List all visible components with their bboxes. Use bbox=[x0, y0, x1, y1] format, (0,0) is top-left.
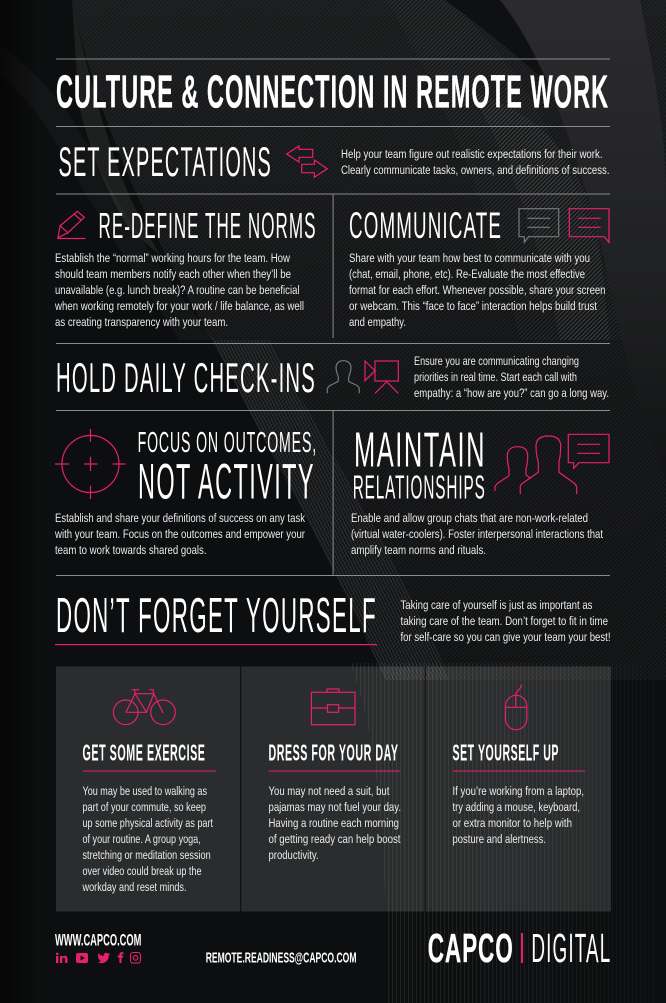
icon: youtube bbox=[76, 953, 88, 963]
icon: linkedin bbox=[56, 953, 68, 963]
text: dress body: You may not need a suit, but bbox=[268, 784, 390, 798]
text: setup body: posture and alertness. bbox=[452, 832, 546, 846]
icon: facebook bbox=[118, 952, 123, 963]
heading underline bbox=[55, 644, 377, 645]
text: exercise body: workday and reset minds. bbox=[82, 880, 186, 894]
panel: communicate bbox=[349, 205, 609, 329]
logo: capco digital: CAPCO bbox=[428, 925, 514, 971]
text: re-define body: as creating transparency with your team. bbox=[55, 315, 228, 329]
website: WWW.CAPCO.COM bbox=[55, 932, 141, 950]
text: dress body bbox=[268, 784, 401, 862]
text: yourself body: Taking care of yourself is just as important as bbox=[400, 598, 592, 612]
icon: twitter bbox=[97, 953, 110, 963]
text: communicate body: Share with your team how best to communicate with you bbox=[349, 251, 590, 265]
text: check-ins body bbox=[414, 354, 609, 400]
panel: maintain relationships bbox=[351, 424, 609, 557]
text: outcomes body: team to work towards shared goals. bbox=[55, 543, 206, 557]
text: set expectations body: Help your team figure out realistic expectations for their work. bbox=[341, 147, 602, 161]
icon: pencil bbox=[58, 211, 86, 238]
heading: maintain: MAINTAIN bbox=[354, 424, 486, 478]
panel: self-care cards bbox=[56, 666, 611, 912]
text: exercise body bbox=[82, 784, 213, 894]
text: exercise body: part of your commute, so keep bbox=[82, 800, 206, 814]
panel: self-care cards: DRESS FOR YOUR DAY bbox=[268, 740, 398, 766]
underline bbox=[83, 770, 216, 772]
text: relationships body: Enable and allow group chats that are non-work-related bbox=[351, 511, 588, 525]
card: get some exercise bbox=[82, 690, 216, 894]
text: yourself body: taking care of the team. Don’t forget to fit in time bbox=[400, 614, 608, 628]
text: relationships body: (virtual water-coolers). Foster interpersonal interactions that bbox=[351, 527, 603, 541]
text: dress body: productivity. bbox=[268, 848, 319, 862]
icon: target bbox=[55, 429, 126, 499]
text: re-define body: Establish the “normal” working hours for the team. How bbox=[55, 251, 290, 265]
text: outcomes body: Establish and share your definitions of success on any task bbox=[55, 511, 306, 525]
icon: bicycle bbox=[113, 690, 175, 725]
panel: focus on outcomes bbox=[54, 427, 317, 557]
panel: hold daily check-ins: HOLD DAILY CHECK-INS bbox=[56, 354, 316, 401]
text: re-define body bbox=[54, 251, 304, 329]
text: check-ins body: Ensure you are communicating changing bbox=[414, 354, 579, 368]
footer bbox=[55, 925, 611, 971]
panel: re-define the norms bbox=[54, 205, 317, 329]
email: REMOTE.READINESS@CAPCO.COM bbox=[206, 950, 356, 967]
text: re-define body: should team members notify each other when they’ll be bbox=[55, 267, 291, 281]
text: setup body: or extra monitor to help with bbox=[452, 816, 572, 830]
card: set yourself up bbox=[452, 685, 585, 846]
text: exercise body: of your routine. A group yoga, bbox=[82, 832, 201, 846]
text: relationships body bbox=[351, 511, 603, 557]
panel: maintain relationships: RELATIONSHIPS bbox=[353, 468, 486, 506]
text: setup body: try adding a mouse, keyboard, bbox=[452, 800, 580, 814]
text: dress body: Having a routine each morning bbox=[268, 816, 399, 830]
text: re-define body: when working remotely for your work / life balance, as well bbox=[54, 299, 304, 313]
icon: pink speech bubble bbox=[569, 209, 609, 242]
panel: set expectations: SET EXPECTATIONS bbox=[58, 138, 272, 185]
text: relationships body: amplify team norms and rituals. bbox=[351, 543, 486, 557]
text: communicate body: or webcam. This “face to face” interaction helps build trust bbox=[349, 299, 597, 313]
heading: communicate: COMMUNICATE bbox=[349, 205, 502, 246]
text: outcomes body bbox=[54, 511, 306, 557]
text: communicate body: (chat, email, phone, etc). Re-Evaluate the most effective bbox=[349, 267, 585, 281]
icon: people with speech bubble bbox=[495, 434, 609, 494]
text: yourself body bbox=[400, 598, 610, 644]
text: check-ins body: empathy: a “how are you?” can go a long way. bbox=[414, 386, 609, 400]
text: NOT ACTIVITY bbox=[138, 454, 315, 510]
text: exercise body: stretching or meditation session bbox=[82, 848, 211, 862]
text: dress body: of getting ready can help boost bbox=[268, 832, 401, 846]
underline bbox=[268, 770, 400, 772]
text: exercise body: over video could break up the bbox=[82, 864, 202, 878]
card: dress for your day bbox=[268, 689, 401, 862]
text: communicate body bbox=[349, 251, 606, 329]
underline bbox=[453, 770, 585, 772]
text: communicate body: and empathy. bbox=[349, 315, 406, 329]
social icons bbox=[56, 952, 140, 963]
text: RE-DEFINE THE NORMS bbox=[98, 205, 316, 246]
text: FOCUS ON OUTCOMES, bbox=[138, 427, 317, 459]
text: dress body: pajamas may not fuel your day. bbox=[268, 800, 401, 814]
text: set expectations body bbox=[341, 147, 610, 177]
icon: mouse bbox=[506, 685, 527, 730]
icon: instagram bbox=[130, 952, 140, 963]
icon: person bbox=[327, 361, 359, 393]
panel: don't forget yourself bbox=[55, 589, 610, 645]
card: get some exercise: GET SOME EXERCISE bbox=[82, 740, 206, 766]
icon: grey speech bubble bbox=[519, 209, 559, 242]
icon: arrows bbox=[287, 146, 327, 177]
icon: projector bbox=[365, 361, 398, 393]
text: setup body: If you’re working from a laptop, bbox=[452, 784, 584, 798]
text: outcomes body: with your team. Focus on the outcomes and empower your bbox=[54, 527, 305, 541]
text: setup body bbox=[452, 784, 584, 846]
text: exercise body: up some physical activity as part bbox=[82, 816, 213, 830]
text: exercise body: You may be used to walking as bbox=[82, 784, 207, 798]
text: yourself body: for self-care so you can give your team your best! bbox=[400, 630, 610, 644]
text: check-ins body: priorities in real time. Start each call with bbox=[414, 370, 577, 384]
text: re-define body: unavailable (e.g. lunch break)? A routine can be beneficial bbox=[55, 283, 300, 297]
icon: briefcase bbox=[311, 689, 355, 725]
